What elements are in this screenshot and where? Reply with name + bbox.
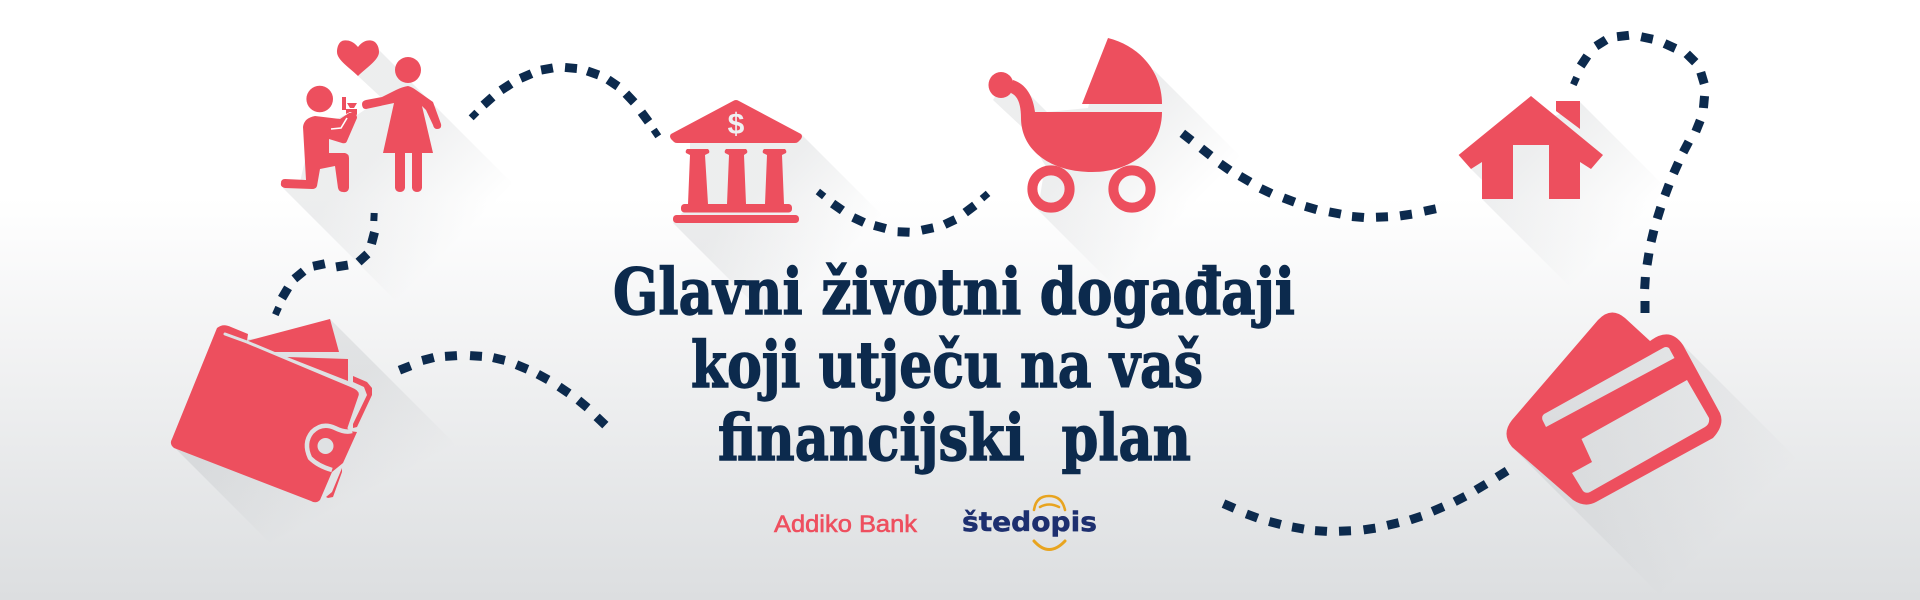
dotted path: house to card	[1575, 36, 1704, 307]
card shape with cut-outs	[1506, 312, 1721, 505]
dotted path: couple to wallet	[277, 217, 374, 311]
title: koji utječu na vaš	[691, 328, 1203, 403]
bank roof	[670, 100, 802, 143]
dotted path: bank to pram	[821, 194, 985, 232]
woman	[362, 57, 441, 192]
banknotes	[247, 319, 339, 352]
dotted path: wallet to title	[405, 356, 601, 421]
icon: baby pram	[988, 38, 1354, 360]
title: financijski plan	[718, 401, 1191, 476]
dotted path: pram to house	[1187, 137, 1430, 217]
dotted path: card to title	[1229, 474, 1502, 531]
heart	[337, 40, 379, 76]
icon: credit cards	[1506, 312, 1883, 598]
title: Glavni životni događaji	[613, 255, 1295, 330]
house body	[1459, 96, 1603, 199]
title	[613, 255, 1295, 476]
logo: Addiko Bank: Addiko Bank	[774, 511, 918, 538]
clasp button	[318, 438, 334, 454]
icon: wallet	[171, 319, 530, 598]
dollar sign: $	[728, 108, 745, 141]
wallet seam	[225, 334, 360, 428]
logo: štedopis	[962, 496, 1097, 550]
pram hood	[1082, 38, 1162, 104]
bank columns	[673, 149, 799, 223]
icon: bank	[670, 100, 952, 373]
icon: house	[1459, 96, 1780, 349]
kneeling man	[281, 86, 357, 192]
wallet clasp	[307, 426, 352, 470]
pram wheels	[1032, 170, 1151, 208]
pram basket and handle	[1011, 80, 1162, 172]
pram handle knob	[988, 72, 1014, 98]
wallet body	[171, 325, 361, 502]
logo: štedopis: štedopis	[962, 507, 1097, 538]
chimney	[1556, 101, 1580, 129]
dotted path: couple to bank	[474, 68, 656, 133]
wallet side tabs	[353, 376, 372, 428]
icon: couple with proposal	[281, 40, 579, 388]
